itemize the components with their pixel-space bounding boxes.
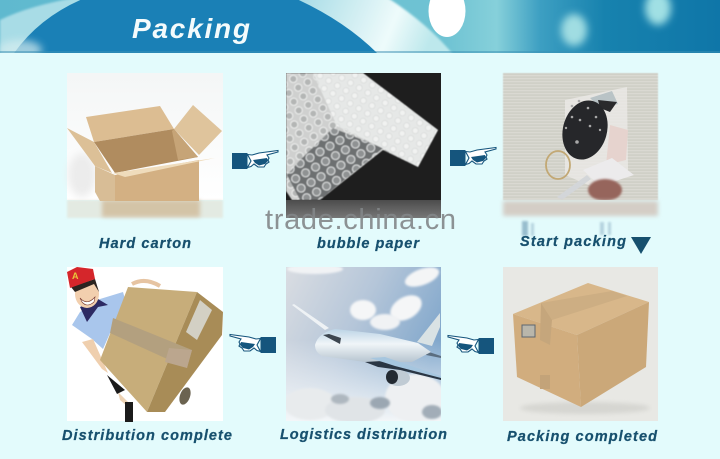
watermark: trade.china.cn: [265, 204, 456, 236]
title: Packing: [132, 13, 250, 44]
white oval: [428, 0, 466, 37]
label: logistics distribution: Logistics distribution: [280, 427, 447, 443]
blurred streaks: [522, 221, 611, 236]
arrow: packing completed to logistics: [448, 336, 494, 354]
photo: delivery man with box: A: [72, 271, 79, 281]
label: start packing: Start packing: [520, 234, 626, 250]
blurred reflection: [503, 201, 658, 216]
arrow: bubble paper to start packing: [450, 148, 496, 166]
label: packing completed: Packing completed: [507, 429, 658, 445]
watermark shadow strip: [286, 200, 441, 218]
photo: delivery man with box: [67, 267, 223, 422]
label: hard carton: Hard carton: [99, 236, 191, 252]
label: bubble paper: bubble paper: [317, 236, 420, 252]
arrow: down triangle: [631, 237, 651, 254]
photo: start packing: [503, 73, 658, 216]
photo: airplane in sky: [284, 263, 445, 423]
photo: hard carton: [67, 73, 223, 218]
label: distribution complete: Distribution complete: [62, 428, 232, 444]
arrow: logistics to distribution: [230, 334, 276, 353]
photo: bubble paper: [286, 73, 441, 200]
photo: sealed carton: [503, 267, 658, 421]
header banner: [0, 0, 720, 53]
arrow: hard carton to bubble paper: [232, 150, 278, 169]
